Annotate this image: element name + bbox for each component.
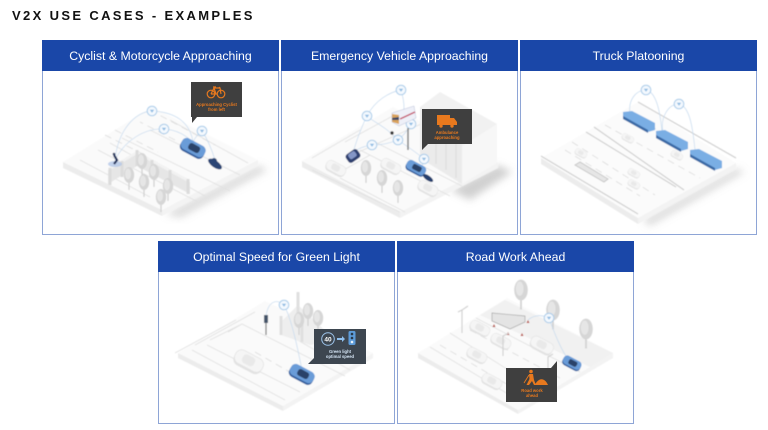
trees: [361, 160, 403, 203]
fence: [281, 305, 335, 345]
building: [420, 92, 497, 184]
callout: road work ahead: [506, 361, 557, 402]
wireless arcs: [353, 85, 429, 169]
callout: approaching cyclist: Approaching Cyclist: [196, 102, 237, 107]
callout: road work ahead: Road work: [521, 388, 543, 393]
icon: ambulance: [437, 115, 457, 128]
callout: road work ahead: ahead: [526, 393, 538, 398]
ambulance: [390, 106, 416, 135]
cars: [324, 148, 440, 199]
icon: bicycle: [207, 87, 225, 98]
trees: [294, 303, 323, 335]
illustration: emergency intersection: [302, 85, 512, 218]
trees: [124, 153, 173, 212]
cars: [574, 132, 684, 190]
callout: ambulance approaching: approaching: [434, 135, 460, 140]
wireless arcs and traffic light: [264, 300, 302, 370]
header: cyclist and motorcycle: [42, 40, 279, 71]
grey truck: [575, 162, 608, 182]
blue car: [287, 362, 317, 387]
arrow: [337, 336, 345, 342]
illustration: highway: [541, 85, 745, 226]
panel: cyclist and motorcycle approaching: [42, 40, 279, 234]
lamps: [458, 306, 553, 378]
cones: [492, 320, 530, 336]
header: truck platooning: [520, 40, 757, 71]
illustration: green light intersection: [175, 292, 373, 411]
wall: [108, 150, 190, 194]
callout: ambulance approaching: Ambulance: [436, 130, 459, 135]
header: emergency vehicle: [281, 40, 518, 71]
title: V2X USE CASES - EXAMPLES: [12, 8, 255, 23]
cyclist: [108, 153, 122, 167]
callout: ambulance approaching: [422, 109, 472, 150]
header: road work ahead: Road Work Ahead: [466, 250, 565, 264]
header: optimal speed: [158, 241, 395, 272]
icon: speed 40: 40: [324, 336, 332, 344]
callout: approaching cyclist: [191, 82, 242, 123]
icon: traffic light: [348, 331, 356, 345]
bus stop: [492, 313, 525, 329]
blue car: [178, 136, 208, 161]
panel: optimal speed for green light: [158, 241, 395, 424]
header: optimal speed: Optimal Speed for Green Light: [193, 250, 360, 264]
header: road work ahead: [397, 241, 634, 272]
icon: road worker: [524, 370, 548, 385]
panel: road work ahead: [397, 241, 634, 424]
callout: green light optimal speed: [308, 329, 366, 364]
callout: approaching cyclist: from left: [208, 107, 225, 112]
callout: green light optimal speed: Green light: [329, 349, 352, 354]
trees: [514, 280, 593, 348]
wireless arcs: [115, 106, 215, 160]
illustration: cyclist intersection: [63, 106, 268, 218]
traffic pole: [407, 128, 409, 150]
truck 2: [656, 130, 688, 152]
header: truck platooning: Truck Platooning: [593, 49, 685, 63]
truck 1: [623, 111, 655, 133]
white car: [231, 347, 266, 376]
cars: [465, 319, 555, 392]
panel: emergency vehicle approaching: [281, 40, 518, 234]
header: cyclist and motorcycle: Cyclist & Motorcycle Approaching: [69, 49, 252, 63]
barriers: [541, 102, 736, 214]
header: emergency vehicle: Emergency Vehicle Approaching: [311, 49, 488, 63]
blue car: [561, 354, 583, 373]
wireless arcs: [630, 85, 695, 150]
panel: truck platooning: [520, 40, 757, 234]
wireless arcs: [528, 313, 570, 362]
illustration: road work: [418, 280, 613, 414]
motorcycle: [206, 157, 224, 171]
truck 3: [690, 149, 722, 171]
callout: green light optimal speed: optimal speed: [326, 354, 355, 359]
